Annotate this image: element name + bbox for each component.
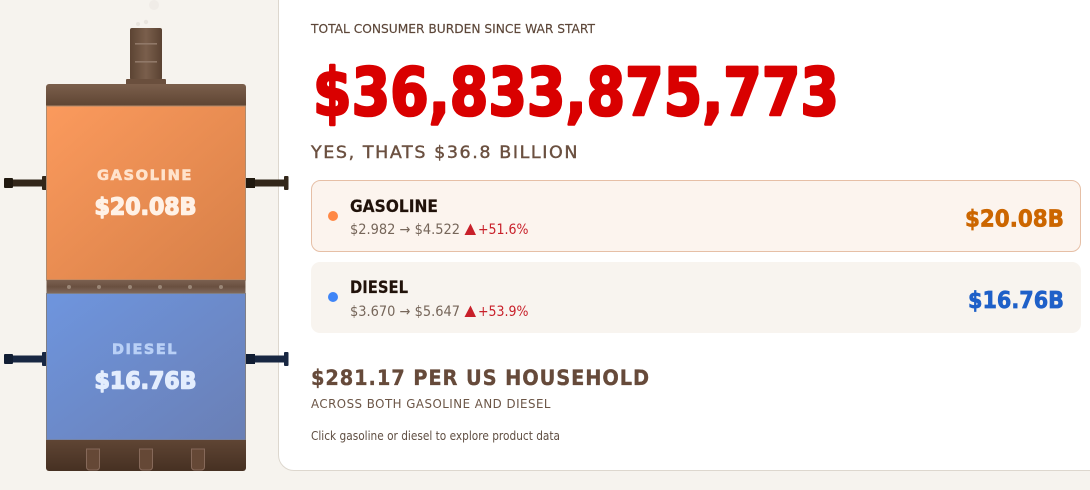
- card: diesel: [311, 262, 1081, 333]
- diesel value: $16.76B: [94, 368, 196, 394]
- diesel dot: [328, 292, 338, 302]
- diesel label: DIESEL: [112, 342, 178, 358]
- subheading: YES, THATS $36.8 BILLION: [310, 143, 579, 162]
- eyebrow heading: TOTAL CONSUMER BURDEN SINCE WAR START: [310, 22, 596, 36]
- chimney: [126, 28, 166, 85]
- per household note: ACROSS BOTH GASOLINE AND DIESEL: [311, 397, 551, 411]
- gasoline change: +51.6%: [478, 222, 528, 238]
- gasoline value: $20.08B: [94, 194, 196, 220]
- tank top cap: [46, 84, 246, 106]
- card: gasoline: [312, 180, 1080, 252]
- diesel title: DIESEL: [350, 278, 408, 297]
- tank base with valves: [46, 440, 246, 471]
- diesel prices: $3.670 → $5.647: [350, 304, 460, 320]
- gasoline prices: $2.982 → $4.522: [350, 222, 460, 238]
- panel: consumer burden summary: [278, 0, 1090, 471]
- diesel pipes: [4, 352, 288, 366]
- smoke puffs: [136, 0, 159, 26]
- gasoline dot: [328, 211, 338, 221]
- total amount: $36,833,875,773: [313, 54, 839, 131]
- diesel amount: $16.76B: [968, 286, 1064, 314]
- hint text: Click gasoline or diesel to explore product data: [311, 429, 560, 443]
- gasoline amount: $20.08B: [965, 204, 1064, 232]
- gasoline compartment: [46, 106, 246, 280]
- tank divider: [46, 280, 246, 294]
- diesel change: +53.9%: [478, 304, 528, 320]
- per household figure: $281.17 PER US HOUSEHOLD: [311, 366, 650, 391]
- diesel compartment: [46, 294, 246, 440]
- gasoline pipes: [4, 176, 288, 190]
- gasoline label: GASOLINE: [97, 168, 193, 184]
- gasoline title: GASOLINE: [350, 197, 438, 216]
- illustration: storage tank: [4, 20, 288, 471]
